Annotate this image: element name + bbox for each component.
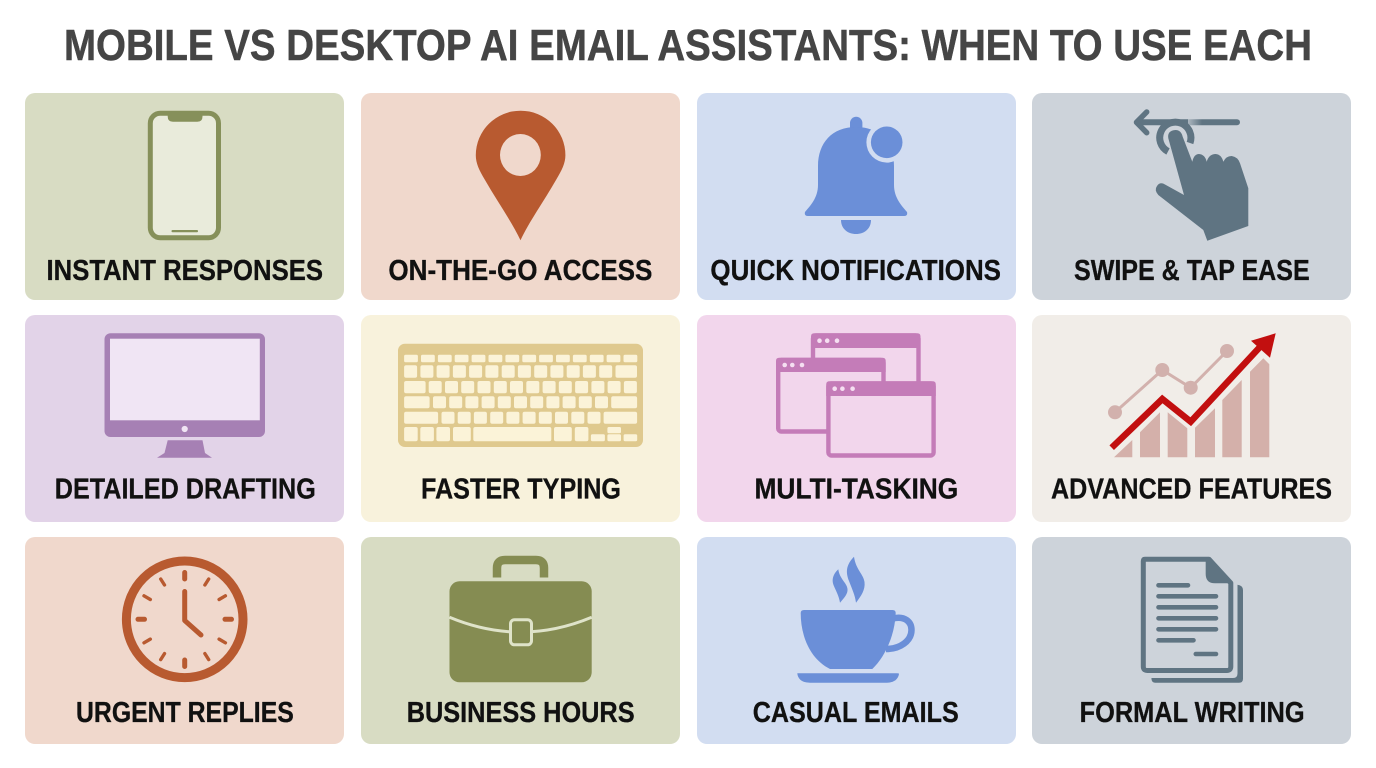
icon: coffee cup [797,557,912,683]
icon: briefcase [450,560,592,682]
icon: bell with badge [805,117,907,234]
label: ADVANCED FEATURES [1051,474,1332,506]
panel: advanced features [1032,315,1351,522]
icon: smartphone [150,113,218,238]
card background [25,93,344,300]
label: INSTANT RESPONSES [46,255,323,287]
label: ON-THE-GO ACCESS [388,255,652,287]
card background [361,537,680,744]
label: URGENT REPLIES [76,697,294,729]
label: BUSINESS HOURS [407,697,635,729]
panel: casual emails [697,537,1016,744]
card background [361,93,680,300]
panel: detailed drafting [25,315,344,522]
label: CASUAL EMAILS [753,697,959,729]
label: FASTER TYPING [421,474,621,506]
label: QUICK NOTIFICATIONS [710,255,1001,287]
icon: desktop monitor [104,333,265,458]
panel: swipe and tap ease [1032,93,1351,300]
icon: location pin [476,111,565,240]
panel: quick notifications [697,93,1016,300]
card background [25,315,344,522]
icon: document [1143,557,1243,683]
icon: growth chart with arrow [1108,333,1276,457]
card background [697,315,1016,522]
card background [697,537,1016,744]
icon: stacked windows [776,333,936,456]
panel: formal writing [1032,537,1351,744]
icon: keyboard [398,344,643,447]
panel: multi-tasking [697,315,1016,522]
panel: on-the-go access [361,93,680,300]
card background [1032,537,1351,744]
label: MULTI-TASKING [754,474,958,506]
label: SWIPE & TAP EASE [1074,255,1310,287]
card background [1032,315,1351,522]
panel: urgent replies [25,537,344,744]
panel: business hours [361,537,680,744]
panel: instant responses [25,93,344,300]
icon: swipe gesture hand [1136,112,1248,241]
icon: clock [126,561,243,678]
label: FORMAL WRITING [1080,697,1305,729]
card background [1032,93,1351,300]
label: DETAILED DRAFTING [55,474,316,506]
card background [697,93,1016,300]
panel: faster typing [361,315,680,522]
card background [25,537,344,744]
card background [361,315,680,522]
